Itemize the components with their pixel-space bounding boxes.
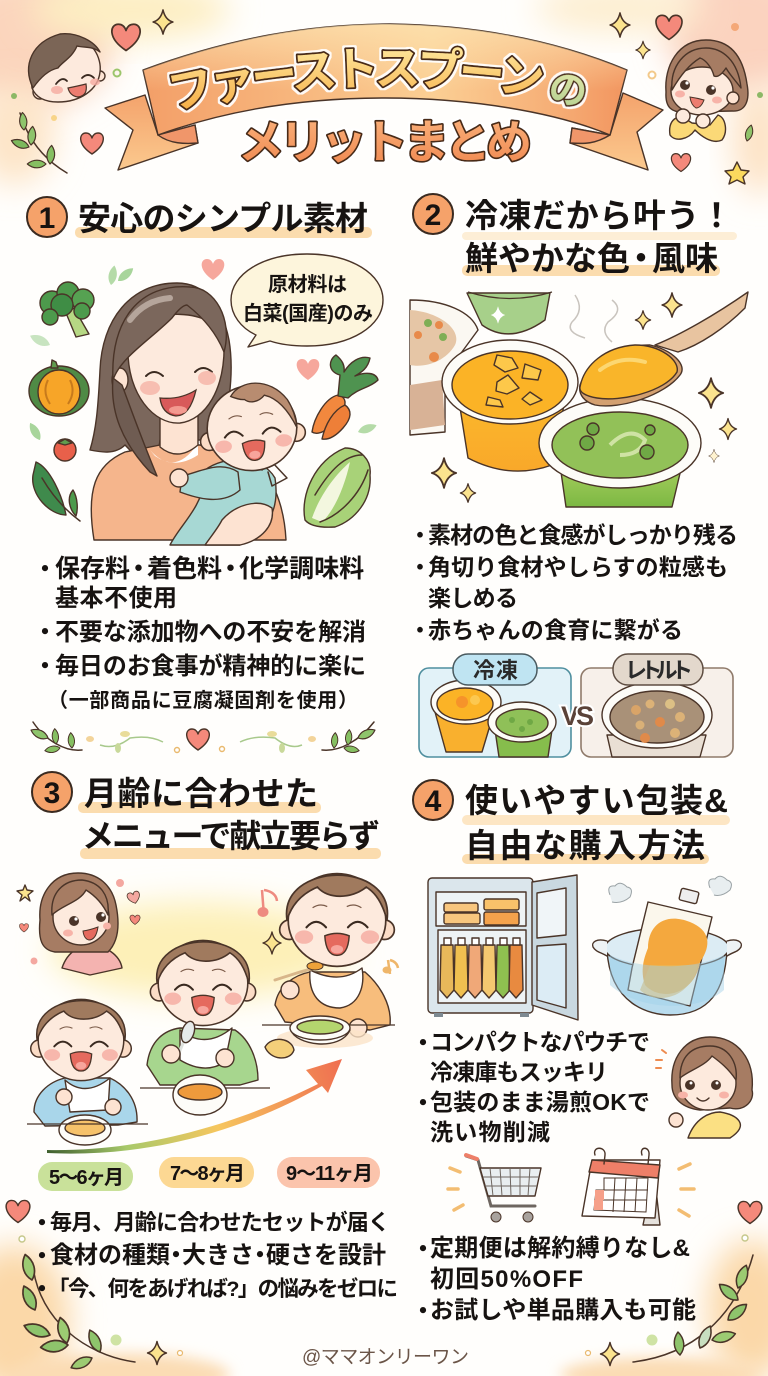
section 4 bullets bottom: ・ bbox=[411, 1236, 435, 1263]
title particle no: の bbox=[545, 66, 591, 115]
illustration: baby food cups bbox=[410, 292, 748, 507]
steam bbox=[570, 295, 618, 342]
title banner: ファーストスプーン bbox=[167, 44, 546, 113]
number badge 4: 4 bbox=[425, 785, 442, 818]
ribbon right tail bbox=[570, 93, 663, 170]
section 1 bullets: 毎日のお食事が精神的に楽に bbox=[55, 652, 366, 680]
ribbon folds bbox=[158, 125, 610, 143]
section 3 bullets: 「今、何をあげれば?」の悩みをゼロに bbox=[48, 1276, 398, 1301]
pill 9-11 months: 9〜11ヶ月 bbox=[286, 1163, 373, 1185]
boy face top left bbox=[29, 34, 105, 102]
carrots bbox=[312, 355, 378, 439]
section 4 bullets bottom: 初回50%OFF bbox=[430, 1266, 583, 1293]
section 4 bullets top: 洗い物削減 bbox=[430, 1119, 550, 1145]
tomato bbox=[54, 439, 76, 461]
section 3 bullets: 毎月、月齢に合わせたセットが届く bbox=[50, 1210, 390, 1235]
illustration: babies by age bbox=[17, 873, 398, 1191]
frozen panel bbox=[419, 654, 571, 757]
music notes and sparkle bbox=[258, 890, 398, 974]
section 1 bullets: ・ bbox=[33, 619, 57, 646]
baby 9-11 months bbox=[262, 874, 395, 1058]
section 4 bullets top: ・ bbox=[411, 1030, 435, 1057]
section 4 bullets bottom: ・ bbox=[411, 1298, 435, 1325]
section 4 bullets top: ・ bbox=[411, 1090, 435, 1117]
heading text 3: メニューで献立要らず bbox=[82, 818, 380, 854]
spinach bbox=[33, 462, 80, 521]
section 1 heading bbox=[27, 197, 372, 238]
retort label: レトルト bbox=[625, 658, 693, 683]
number badge 1: 1 bbox=[39, 202, 55, 235]
frozen label: 冷凍 bbox=[473, 658, 518, 683]
accents around mother bbox=[17, 879, 141, 964]
section 1 bullets bbox=[33, 555, 366, 712]
pumpkin bbox=[29, 360, 89, 416]
illustration: mother and baby bbox=[90, 283, 309, 545]
section 3 heading bbox=[32, 772, 381, 859]
heading text 4: 自由な購入方法 bbox=[465, 827, 705, 864]
girl top right bbox=[666, 40, 748, 141]
section 4 bullets bottom: お試しや単品購入も可能 bbox=[430, 1297, 696, 1324]
heading text 3: 月齢に合わせた bbox=[84, 775, 318, 812]
calendar icon bbox=[582, 1148, 694, 1225]
section 4 bullets top bbox=[411, 1029, 650, 1145]
vs label: VS bbox=[561, 701, 594, 731]
highlight bbox=[462, 232, 737, 240]
section 4 bullets top: コンパクトなパウチで bbox=[430, 1029, 650, 1055]
baby 7-8 months bbox=[140, 940, 270, 1115]
section 1 bullets: ・ bbox=[33, 556, 57, 583]
footer credit: @ママオンリーワン bbox=[302, 1347, 469, 1368]
number badge 2 bbox=[413, 194, 453, 234]
sprig bottom left bbox=[19, 1253, 135, 1372]
comparison: frozen vs retort bbox=[419, 654, 733, 757]
heading text 3 bbox=[82, 775, 380, 854]
number badge 1 bbox=[27, 197, 67, 237]
shopping cart icon bbox=[448, 1155, 541, 1222]
heading text 2: 冷凍だから叶う！ bbox=[465, 197, 733, 234]
section 4 heading bbox=[413, 780, 730, 864]
section 2 heading bbox=[413, 194, 737, 277]
section 2 bullets: 赤ちゃんの食育に繋がる bbox=[428, 617, 683, 643]
section 2 bullets: ・ bbox=[409, 523, 431, 548]
mother bbox=[90, 283, 286, 540]
sprig bottom right bbox=[633, 1255, 753, 1362]
yellow wash bbox=[50, 902, 350, 998]
section 1 bullets: （一部商品に豆腐凝固剤を使用） bbox=[48, 689, 358, 712]
heading text 4: 使いやすい包装& bbox=[465, 782, 728, 819]
section 3 bullets: ・ bbox=[30, 1243, 54, 1270]
growth arrow bbox=[47, 1059, 342, 1154]
speech bubble bbox=[231, 254, 383, 347]
pill 5-6 months bbox=[38, 1162, 133, 1191]
heading text 1: 安心のシンプル素材 bbox=[78, 200, 368, 237]
age pills bbox=[38, 1157, 380, 1191]
section 4 bullets top: 冷凍庫もスッキリ bbox=[430, 1059, 608, 1085]
section 1 bullets: ・ bbox=[33, 653, 57, 680]
highlight bbox=[75, 227, 372, 238]
sprig top left bbox=[10, 112, 67, 173]
frozen label bbox=[453, 654, 537, 685]
retort panel bbox=[581, 654, 733, 757]
sparkles bbox=[432, 293, 737, 502]
baby in arms bbox=[170, 378, 309, 545]
happy mother bbox=[40, 873, 122, 975]
heading text 2: 鮮やかな色・風味 bbox=[465, 240, 718, 277]
illustration: pouch in hot water bbox=[593, 876, 741, 1015]
speech bubble: 白菜(国産)のみ bbox=[243, 302, 373, 325]
section 2 bullets: 楽しめる bbox=[428, 585, 518, 611]
section 2 bullets: ・ bbox=[409, 555, 431, 580]
decorations bottom right bbox=[586, 1201, 762, 1366]
napa cabbage bbox=[304, 448, 370, 527]
section 3 bullets: ・ bbox=[30, 1276, 54, 1303]
broccoli bbox=[40, 282, 94, 337]
highlight bbox=[462, 815, 730, 825]
number badge 3 bbox=[32, 772, 72, 812]
small leaves and hearts bbox=[27, 259, 378, 442]
header decorations bbox=[11, 10, 763, 184]
title line 1 bbox=[172, 85, 552, 110]
orange cup bbox=[442, 340, 578, 471]
back green cup bbox=[467, 292, 552, 334]
green cup bbox=[539, 398, 701, 507]
section 3 bullets bbox=[30, 1210, 398, 1303]
section 2 bullets bbox=[409, 522, 738, 643]
title banner bbox=[104, 23, 664, 171]
section 4 bullets bottom: 定期便は解約縛りなし& bbox=[430, 1234, 690, 1262]
pill 9-11 months bbox=[277, 1157, 380, 1188]
section 4 bullets top: 包装のまま湯煎OKで bbox=[430, 1089, 650, 1115]
number badge 4 bbox=[413, 780, 453, 820]
speech bubble: 原材料は bbox=[268, 273, 347, 296]
ribbon highlight bbox=[143, 24, 627, 135]
divider bbox=[29, 722, 377, 754]
section 2 bullets: 角切り食材やしらすの粒感も bbox=[428, 554, 728, 580]
pill 7-8 months: 7〜8ヶ月 bbox=[170, 1163, 245, 1185]
number badge 2: 2 bbox=[425, 199, 441, 232]
illustration: freezer with pouches bbox=[428, 875, 578, 1020]
pill 5-6 months: 5〜6ヶ月 bbox=[49, 1167, 124, 1189]
baby 5-6 months bbox=[27, 999, 148, 1145]
section 2 bullets: 素材の色と食感がしっかり残る bbox=[428, 522, 738, 548]
heading text 4 bbox=[465, 782, 728, 864]
decorations bottom left bbox=[6, 1200, 182, 1365]
section 1 bullets: 基本不使用 bbox=[55, 585, 177, 612]
ribbon left tail bbox=[105, 95, 198, 170]
section 1 bullets: 不要な添加物への不安を解消 bbox=[55, 619, 366, 646]
number badge 3: 3 bbox=[44, 777, 60, 810]
spoon with puree bbox=[580, 292, 748, 406]
girl with fist bbox=[656, 1037, 753, 1138]
vegetables bbox=[27, 259, 378, 527]
pill 7-8 months bbox=[159, 1157, 254, 1188]
highlight bbox=[78, 802, 321, 813]
section 1 bullets: 保存料・着色料・化学調味料 bbox=[55, 555, 364, 583]
title line 2: メリットまとめ bbox=[238, 116, 532, 168]
section 4 bullets bottom bbox=[411, 1234, 696, 1325]
section 2 bullets: ・ bbox=[409, 618, 431, 643]
section 3 bullets: 食材の種類・大きさ・硬さを設計 bbox=[50, 1242, 386, 1269]
back left cup bbox=[410, 300, 478, 435]
section 3 bullets: ・ bbox=[30, 1210, 54, 1237]
heading text 2 bbox=[465, 197, 733, 277]
ribbon main band bbox=[143, 24, 627, 135]
retort label bbox=[613, 654, 703, 685]
